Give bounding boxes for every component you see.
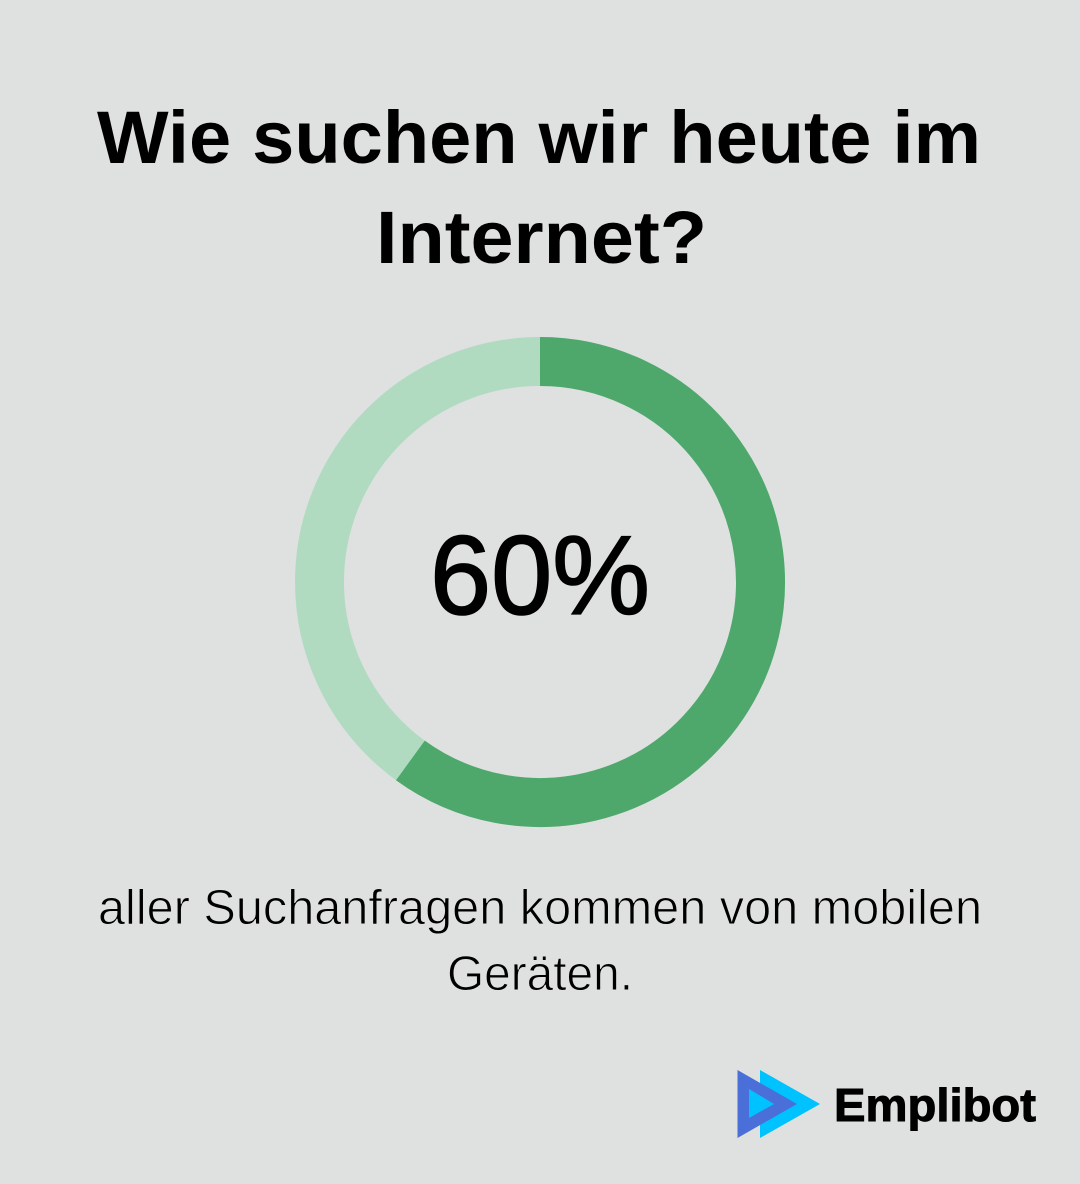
description text [98,881,982,1001]
title [97,96,981,279]
donut chart: 60% [320,362,760,802]
description text: Geräten. [447,947,633,1001]
title: Internet? [376,196,707,279]
description text: aller Suchanfragen kommen von mobilen [98,881,982,935]
logo wordmark: Emplibot [834,1079,1036,1131]
logo: Emplibot [738,1070,1036,1138]
donut value: 60% [430,513,650,638]
title: Wie suchen wir heute im [97,96,981,179]
icon: play triangles [738,1070,820,1138]
